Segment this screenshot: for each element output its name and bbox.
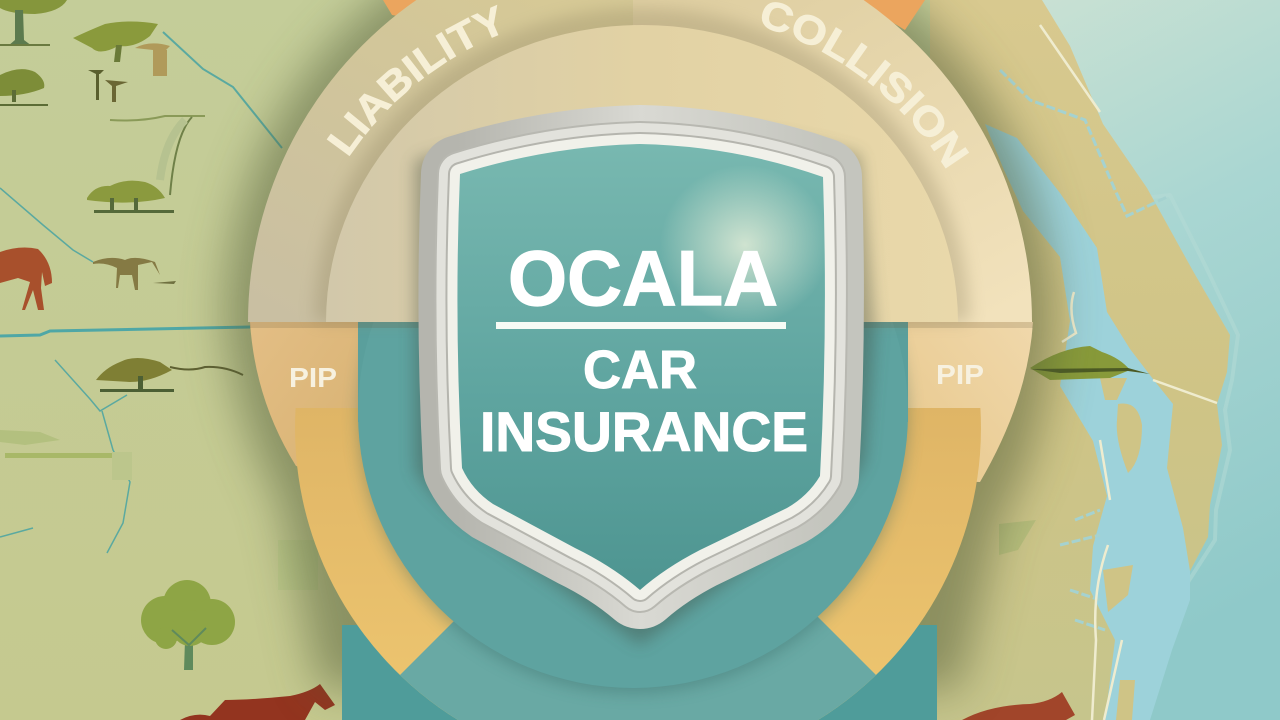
orange pieces above the ring bbox=[383, 0, 925, 30]
icon: acacia tree middle bbox=[87, 181, 174, 213]
shield: light glare bbox=[660, 165, 830, 325]
rivers on the left map bbox=[0, 32, 282, 553]
lower teal block bbox=[342, 625, 937, 720]
subtitle: INSURANCE: INSURANCE bbox=[480, 400, 808, 463]
shield: middle light band bbox=[457, 144, 825, 590]
divider under title bbox=[496, 322, 786, 329]
icon: tree top left bbox=[0, 0, 67, 46]
shield: inner white band bbox=[457, 144, 825, 590]
icon: flat tree left bbox=[0, 69, 48, 106]
icon: acacia tree bbox=[73, 22, 158, 62]
shield: outer silver frame bbox=[457, 144, 825, 590]
panel: liability and collision ring bbox=[248, 0, 1032, 322]
icon: sketch lines bbox=[110, 116, 205, 195]
ring shadow bbox=[250, 322, 1033, 328]
shield: teal face bbox=[457, 144, 825, 590]
icon: big green tree bbox=[141, 580, 235, 670]
map: coastal outer channel line bbox=[1127, 195, 1238, 610]
map: green patch bbox=[999, 520, 1036, 555]
icon: baobab and mushroom trees bbox=[88, 43, 170, 102]
shield: outer ridge bbox=[457, 144, 825, 590]
shadow around the medallion bbox=[225, 0, 1055, 690]
smudges on the left map bbox=[0, 430, 318, 590]
subtitle: CAR: CAR bbox=[583, 340, 697, 400]
map: lagoon water bbox=[985, 124, 1190, 720]
icon: horse bottom right bbox=[962, 692, 1075, 720]
icon: small brown tree bbox=[93, 258, 176, 290]
label: LIABILITY: LIABILITY bbox=[326, 4, 498, 156]
panel: PIP peach segments bbox=[250, 322, 1033, 482]
map: olive tree on the lagoon bbox=[1030, 346, 1150, 380]
map: inner waterway scribbles bbox=[1000, 70, 1167, 630]
shield shadow bbox=[415, 126, 875, 645]
icon: acacia with ridge bbox=[96, 358, 243, 392]
label: PIP left: PIP bbox=[289, 362, 337, 393]
panel: teal centre disc bbox=[358, 138, 908, 688]
label: PIP right: PIP bbox=[936, 359, 984, 390]
map: land patches in the lagoon bbox=[1100, 378, 1142, 720]
map: mainland and barrier land bbox=[930, 0, 1230, 720]
icon: horse left bbox=[0, 248, 52, 310]
icon: horse bottom left bbox=[180, 684, 335, 720]
disc shadow bbox=[358, 143, 908, 693]
map: east coast with ocean, lagoon and barrier island bbox=[930, 0, 1280, 720]
shield: inner ridge bbox=[457, 144, 825, 590]
panel: orange PIP band bbox=[295, 408, 981, 720]
map: light roads bbox=[1040, 25, 1217, 720]
panel: lighter teal arc bbox=[400, 437, 876, 720]
title: OCALA: OCALA bbox=[508, 234, 778, 322]
shield emblem bbox=[457, 144, 830, 590]
